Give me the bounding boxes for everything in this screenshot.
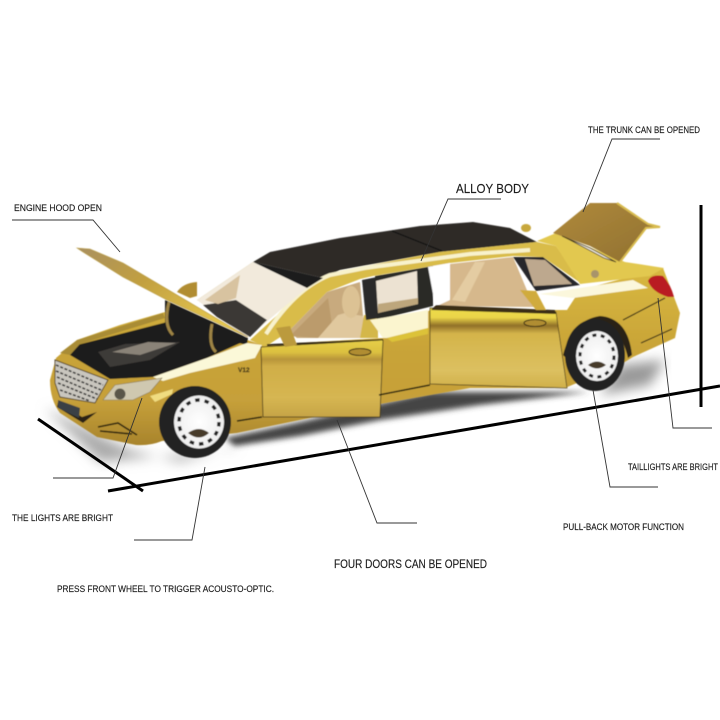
- rear seat: [318, 313, 364, 338]
- windshield header: [253, 262, 323, 288]
- callout: alloy body: ALLOY BODY: [456, 182, 530, 196]
- car body: [50, 268, 680, 445]
- fender highlight: [153, 343, 262, 381]
- callout: lights: [12, 398, 142, 523]
- windscreen pillar: [197, 262, 256, 302]
- front door: [261, 340, 383, 417]
- pillar gold: [360, 315, 378, 338]
- engine bay: [70, 322, 247, 379]
- open hood: [77, 248, 248, 337]
- middle window glass: [376, 271, 418, 313]
- trunk opening: [562, 236, 616, 262]
- rear side window: [513, 257, 580, 291]
- headlight: [103, 378, 162, 400]
- callout: engine hood: ENGINE HOOD OPEN: [14, 203, 102, 213]
- sill lines: [237, 385, 430, 421]
- callout: pull-back motor: PULL-BACK MOTOR FUNCTION: [563, 522, 684, 532]
- front door window interior: [288, 282, 365, 338]
- headlight lens: [114, 388, 126, 400]
- fender bright spot: [150, 389, 173, 402]
- rear seat fold: [452, 262, 485, 302]
- callout: pull-back motor: [563, 390, 684, 532]
- glass seat: [378, 298, 418, 313]
- mid belt highlight: [370, 310, 428, 338]
- dashboard: [203, 300, 267, 337]
- tail light: [648, 276, 674, 297]
- belt line: [267, 340, 383, 345]
- callout: four doors: [334, 420, 487, 571]
- rear deck: [537, 233, 664, 284]
- callout: press front wheel: PRESS FRONT WHEEL TO TRIGGER ACOUSTO-OPTIC.: [57, 584, 274, 594]
- rear highlight: [540, 280, 648, 298]
- V12 badge: V12: [238, 367, 250, 374]
- rear door top edge: [431, 305, 556, 314]
- grille: [55, 360, 108, 403]
- middle window pillar: [362, 277, 380, 320]
- front seat back: [290, 298, 332, 338]
- roof antenna: [521, 224, 531, 232]
- front wheel: [159, 386, 231, 458]
- rear gold pillar: [520, 290, 546, 310]
- callout: trunk: THE TRUNK CAN BE OPENED: [588, 125, 700, 135]
- rear wheel: [565, 319, 625, 391]
- number plate: [58, 400, 80, 418]
- fog lights: [98, 423, 137, 435]
- roof: [253, 222, 537, 278]
- door mirror: [276, 326, 297, 347]
- ground shadow: [45, 360, 665, 462]
- rear glass: [525, 259, 572, 286]
- roof gold rail: [250, 242, 582, 347]
- callout: lights: THE LIGHTS ARE BRIGHT: [12, 513, 113, 523]
- callout: four doors: FOUR DOORS CAN BE OPENED: [334, 557, 487, 571]
- rear door: [430, 308, 567, 388]
- dark under hood: [165, 300, 248, 345]
- rear door handle: [524, 320, 546, 326]
- callout: press front wheel: [57, 467, 274, 594]
- engine detail: [98, 342, 180, 367]
- callout: engine hood: [12, 203, 120, 252]
- rear interior: [437, 257, 534, 307]
- lower front intake: [57, 402, 97, 423]
- mid belt yellow edge: [387, 328, 428, 342]
- engine cover: [112, 342, 176, 355]
- hood rim: [60, 313, 165, 355]
- ground lines: [38, 205, 720, 491]
- door handle: [349, 348, 371, 356]
- callout: trunk: [583, 125, 700, 212]
- mirror left: [177, 282, 197, 298]
- windshield: [197, 262, 307, 338]
- rear wheel arch: [563, 316, 632, 360]
- trunk lid rim: [617, 203, 660, 262]
- windshield reflection: [205, 275, 240, 304]
- trunk lid: [553, 203, 660, 262]
- tail trim: [623, 298, 672, 343]
- roof seam: [392, 231, 442, 251]
- white door gap: [428, 263, 453, 305]
- rail highlight: [266, 250, 530, 334]
- callout: alloy body: [421, 182, 530, 261]
- middle window frame: [375, 266, 433, 320]
- hood struts: [167, 302, 216, 352]
- gold limousine model car: [50, 203, 680, 458]
- callout: taillights: [628, 298, 718, 472]
- rear emblem: [591, 270, 599, 278]
- seat headrest: [342, 286, 360, 318]
